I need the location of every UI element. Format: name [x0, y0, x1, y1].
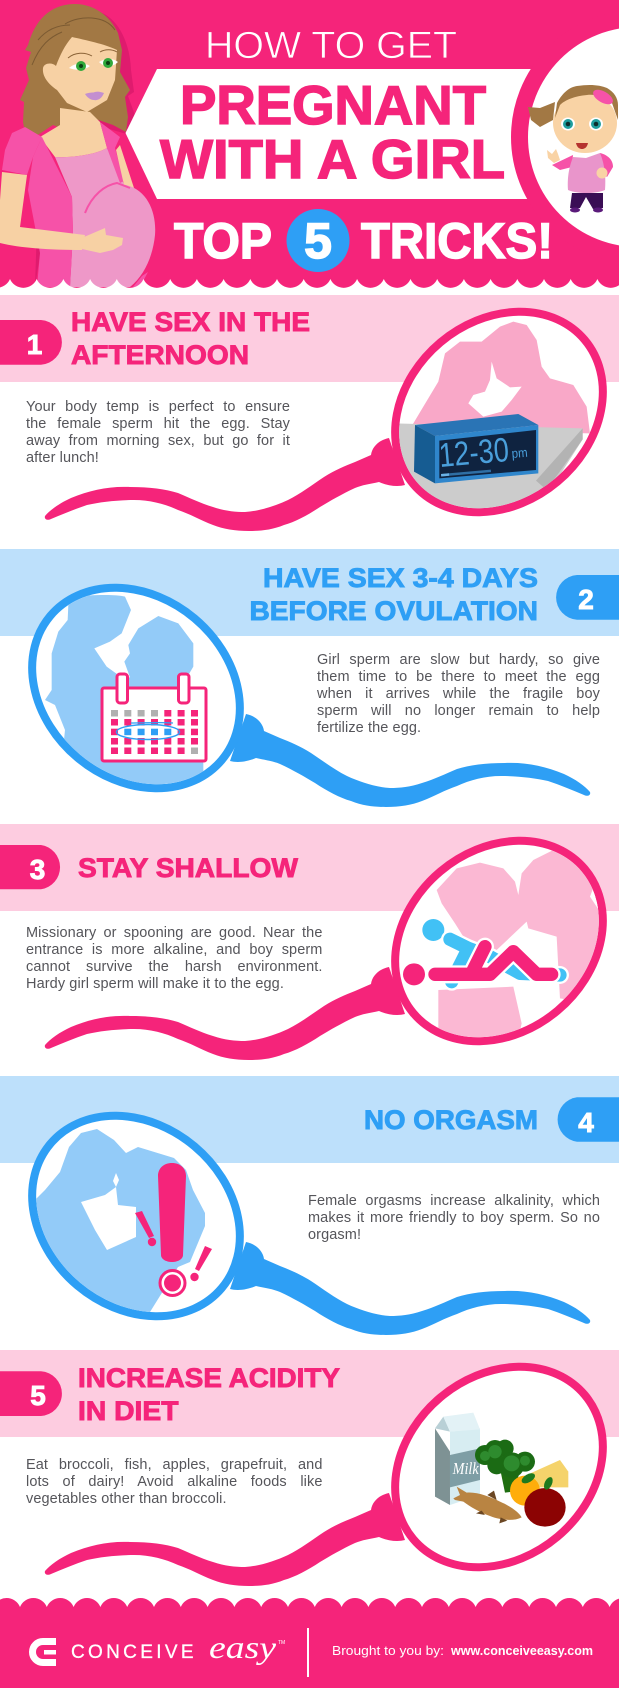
- header background: [0, 0, 619, 288]
- heading 4: NO ORGASM: [364, 1105, 538, 1135]
- heading: top 5 tricks: [174, 209, 553, 272]
- sperm head ring 1: [355, 270, 619, 554]
- number 3: 3: [30, 854, 45, 885]
- text block: panel 2: [317, 652, 600, 736]
- title: pregnant with a girl: [160, 74, 505, 190]
- heading 2: BEFORE OVULATION: [250, 596, 538, 626]
- text block: panel 1: [26, 399, 290, 466]
- heading: how to get: HOW TO GET: [205, 25, 457, 67]
- icon: exclamation marks: [135, 1163, 212, 1296]
- number tab 4: [558, 1097, 619, 1142]
- white scallop edge of header: [0, 279, 619, 296]
- number tab 2: [556, 575, 619, 620]
- sperm head ring 5: [355, 1325, 619, 1609]
- white title banner: [126, 69, 560, 199]
- heading 1: [71, 307, 310, 370]
- logo: conceive easy: CONCEIVE: [71, 1642, 194, 1663]
- illustration: pregnant woman: [0, 4, 155, 287]
- panel 5: increase acidity in diet: [0, 1325, 619, 1609]
- sperm tail 2: [230, 714, 590, 807]
- text block: panel 3: Missionary or spooning are good. Near the: [26, 925, 322, 941]
- number tab 5: [0, 1371, 62, 1416]
- text block: panel 4: orgasm!: [308, 1227, 361, 1243]
- clock time: pm: [511, 445, 528, 461]
- image: couple silhouette: [45, 595, 203, 797]
- text block: panel 2: sperm will no longer remain to help: [317, 703, 600, 719]
- sperm tail 5: [45, 1493, 405, 1586]
- number 1: 1: [27, 329, 42, 360]
- image: kissing couple silhouette: [20, 1129, 205, 1312]
- sperm tail 4: [230, 1242, 590, 1335]
- panel 3: stay shallow: [0, 799, 619, 1083]
- icon: calendar: [102, 674, 206, 761]
- footer credit: www.conceiveeasy.com: [450, 1643, 593, 1658]
- logo: conceive easy: [32, 1629, 285, 1665]
- sperm head ring 2: [0, 546, 280, 830]
- text block: panel 2: them time to be there to meet the egg: [317, 669, 600, 685]
- footer credit: [332, 1643, 593, 1658]
- text block: panel 3: Hardy girl sperm will make it to the egg.: [26, 976, 284, 992]
- number 2: 2: [578, 584, 594, 615]
- image: couple with alarm clock: [390, 322, 590, 517]
- image: couple and position figures: [403, 850, 610, 1047]
- title: pregnant with a girl: PREGNANT: [180, 74, 486, 136]
- heading 5: INCREASE ACIDITY: [78, 1363, 340, 1393]
- text block: panel 2: fertilize the egg.: [317, 720, 421, 736]
- number tab 3: [0, 845, 60, 889]
- heading: top 5 tricks: TRICKS!: [361, 213, 553, 269]
- footer background with scallops: [0, 1598, 619, 1688]
- text block: panel 5: vegetables other than broccoli.: [26, 1491, 227, 1507]
- footer divider: [307, 1628, 309, 1677]
- sperm head ring 3: [355, 799, 619, 1083]
- heading: top 5 tricks: TOP: [174, 213, 272, 269]
- heading 3: STAY SHALLOW: [78, 853, 299, 883]
- panel 1: have sex in the afternoon: [0, 295, 619, 531]
- number 4: 4: [578, 1107, 594, 1138]
- sperm tail 1: [45, 438, 405, 531]
- sperm head ring 4: [0, 1074, 280, 1358]
- heading 1: HAVE SEX IN THE: [71, 307, 310, 337]
- text block: panel 3: [26, 925, 322, 992]
- panel 2: have sex 3-4 days before ovulation: [0, 546, 619, 830]
- clock time: 12-30: [437, 431, 510, 475]
- number 5: 5: [30, 1380, 46, 1411]
- logo: conceive easy: TM: [278, 1640, 285, 1646]
- heading 5: IN DIET: [78, 1396, 179, 1426]
- number tab 1: [0, 320, 62, 365]
- image: acidic foods: [435, 1413, 568, 1527]
- text block: panel 5: Eat broccoli, fish, apples, grapefruit, and: [26, 1457, 322, 1473]
- image: acidic foods: Milk: [452, 1459, 479, 1478]
- title: pregnant with a girl: WITH A GIRL: [160, 128, 505, 190]
- sperm tail 3: [45, 967, 405, 1060]
- heading 5: [78, 1363, 340, 1426]
- text block: panel 1: away from morning sex, but go for it: [26, 433, 290, 449]
- logo: conceive easy: easy: [209, 1629, 277, 1665]
- panel 4: no orgasm: [0, 1074, 619, 1358]
- text block: panel 2: Girl sperm are slow but hardy, so give: [317, 652, 600, 668]
- heading 2: [250, 563, 538, 626]
- circle with little girl: [520, 18, 619, 256]
- heading 2: HAVE SEX 3-4 DAYS: [263, 563, 538, 593]
- text block: panel 5: lots of dairy! Avoid alkaline foods like: [26, 1474, 322, 1490]
- text block: panel 4: Female orgasms increase alkalinity, which: [308, 1193, 600, 1209]
- text block: panel 4: [308, 1193, 600, 1243]
- text block: panel 4: makes it more friendly to boy sperm. So no: [308, 1210, 600, 1226]
- text block: panel 3: entrance is more alkaline, and boy sperm: [26, 942, 322, 958]
- heading 1: AFTERNOON: [71, 340, 249, 370]
- footer credit: Brought to you by:: [332, 1643, 444, 1658]
- text block: panel 1: the female sperm hit the egg. Stay: [26, 416, 290, 432]
- text block: panel 2: when it arrives while the fragile boy: [317, 686, 600, 702]
- text block: panel 5: [26, 1457, 322, 1507]
- text block: panel 3: cannot survive the harsh environment.: [26, 959, 322, 975]
- text block: panel 1: Your body temp is perfect to ensure: [26, 399, 290, 415]
- text block: panel 1: after lunch!: [26, 450, 99, 466]
- heading: top 5 tricks: 5: [304, 213, 332, 269]
